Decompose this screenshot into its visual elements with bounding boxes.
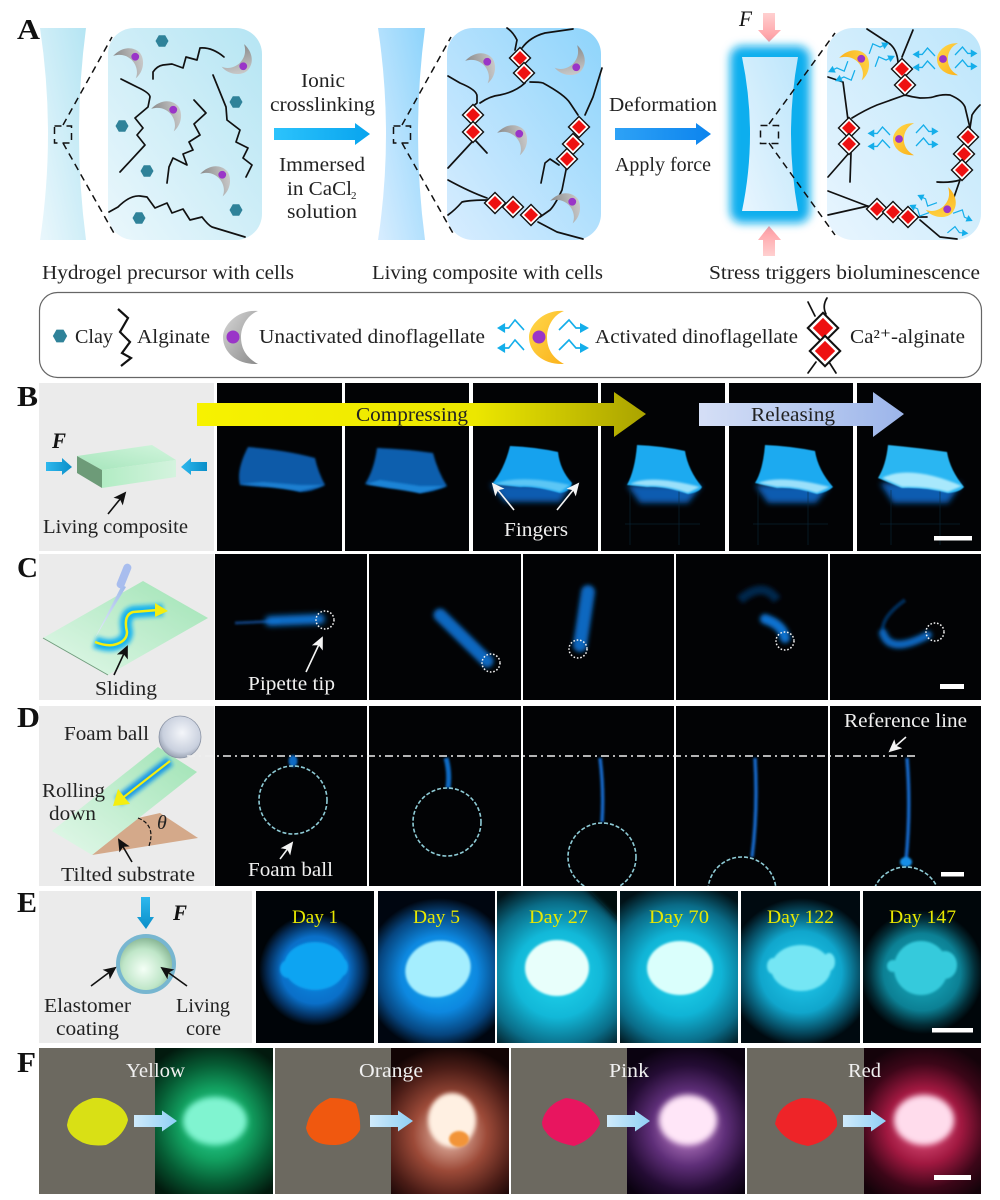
photo day 122 — [741, 891, 860, 1043]
arrow: deformation — [615, 123, 711, 145]
streak 3 — [569, 592, 588, 658]
compressing arrow: Compressing — [356, 404, 468, 426]
pipette — [95, 562, 133, 638]
compressing arrow — [197, 392, 646, 437]
dinoflagellate cells — [113, 41, 259, 196]
activated cells — [839, 43, 963, 225]
text: immersed in CaCl2 solution — [279, 154, 365, 223]
elastomer coating: coating — [56, 1018, 119, 1040]
photo day 1 — [256, 891, 374, 1043]
arrow to substrate — [119, 840, 132, 862]
releasing arrow — [699, 392, 904, 437]
text: immersed in CaCl2 solution: 2 — [351, 190, 356, 202]
living core — [176, 995, 230, 1040]
hydrogel precursor strip — [40, 28, 86, 240]
label F: F — [17, 1047, 36, 1079]
photo day 27: Day 27 — [529, 907, 588, 928]
panel D — [17, 702, 981, 935]
photo day 5: Day 5 — [413, 907, 460, 928]
schematic D — [39, 706, 214, 886]
arrows to coating and core — [91, 968, 187, 986]
reference line — [187, 755, 917, 757]
glowing deformed hydrogel — [730, 46, 810, 223]
caption: Tilted substrate — [61, 864, 195, 886]
reference line annotation: Reference line — [844, 710, 967, 732]
sample frame 5 — [753, 445, 833, 545]
pink force arrow bottom — [758, 226, 781, 256]
schematic C — [39, 554, 214, 700]
yellow sample photo — [39, 1048, 273, 1194]
sample frame 1 — [239, 447, 325, 492]
legend text: clay: Clay — [75, 326, 113, 348]
streak 5 — [883, 600, 944, 645]
zoom panel: activated cells — [760, 28, 981, 240]
zoom panel: hydrogel precursor — [54, 28, 262, 240]
plate — [43, 581, 208, 675]
legend text: activated: Activated dinoflagellate — [595, 326, 798, 348]
streak 1 — [235, 611, 334, 629]
trail and ball 3 — [567, 756, 637, 886]
photo day 27 — [497, 891, 617, 1043]
fingers annotation: Fingers — [504, 519, 568, 541]
label C: C — [17, 552, 38, 584]
trail and ball 2 — [413, 758, 481, 856]
living core: Living — [176, 995, 230, 1017]
schematic E — [39, 891, 252, 1043]
legend icon: clay — [53, 330, 67, 342]
sample frame 4 — [625, 445, 702, 545]
streak 4 — [740, 590, 794, 650]
pink sample photo — [511, 1048, 745, 1194]
text: ionic crosslinking: Ionic — [301, 70, 345, 92]
calcium crosslinks — [462, 48, 590, 226]
photo day 147: Day 147 — [889, 907, 956, 928]
scale bar E — [932, 1028, 973, 1032]
legend icon: alginate — [118, 309, 131, 366]
red sample photo — [747, 1048, 981, 1194]
brown substrate — [92, 813, 198, 855]
pink force arrow top — [758, 13, 781, 42]
photo day 5 — [378, 891, 495, 1043]
zoom guide lines — [394, 37, 454, 235]
text: immersed in CaCl2 solution: solution — [287, 201, 357, 223]
text: ionic crosslinking — [270, 70, 375, 116]
plate front edge — [43, 638, 108, 675]
legend text: alginate: Alginate — [137, 326, 210, 348]
panel F — [17, 1047, 981, 1194]
zoom guide lines — [760, 33, 835, 235]
foam ball annotation: Foam ball — [248, 859, 333, 881]
text: deformation: Deformation — [609, 94, 717, 116]
coated sphere — [116, 934, 176, 994]
force label F: F — [738, 6, 753, 31]
legend icon: calcium alginate — [808, 298, 840, 373]
sample frame 6 — [878, 445, 964, 545]
yellow arrow — [120, 761, 170, 800]
sample frame 2 — [365, 448, 447, 493]
arrow: ionic crosslinking — [274, 123, 370, 145]
panel A: schematic — [17, 6, 981, 284]
caption: stress triggers: Stress triggers bioluminescence — [709, 262, 980, 284]
sample frame 3 — [490, 446, 572, 502]
pink sample photo: Pink — [609, 1060, 649, 1082]
trail and ball 4 — [708, 756, 776, 886]
orange sample photo — [275, 1048, 509, 1194]
orange sample photo: Orange — [359, 1060, 423, 1082]
scale bar D — [941, 872, 964, 876]
yellow sample photo: Yellow — [126, 1060, 186, 1082]
photo day 70 — [620, 891, 738, 1043]
text: ionic crosslinking: crosslinking — [270, 94, 375, 116]
scale bar C — [940, 684, 964, 689]
rolling down — [42, 780, 105, 825]
scale bar F — [934, 1175, 971, 1180]
emitted light arrows — [826, 37, 978, 237]
foam ball — [159, 716, 201, 758]
calcium crosslinks — [838, 58, 978, 228]
composite block — [77, 445, 176, 488]
theta: θ — [157, 812, 167, 834]
legend text: calcium alginate: Ca²⁺-alginate — [850, 326, 965, 348]
rolling down: Rolling — [42, 780, 105, 802]
photo day 1: Day 1 — [292, 907, 338, 928]
tilted plate — [52, 747, 197, 855]
legend text: unactivated: Unactivated dinoflagellate — [259, 326, 485, 348]
panel E — [17, 880, 981, 1043]
glow trail — [95, 610, 163, 645]
streak 2 — [440, 615, 500, 672]
foam ball label: Foam ball — [64, 723, 149, 745]
yellow arrow head — [113, 789, 130, 806]
scale bar B — [934, 536, 972, 540]
legend icon: activated cell — [497, 311, 589, 364]
zoom panel: crosslinked composite — [394, 28, 602, 240]
force arrow — [137, 897, 154, 929]
legend icon: unactivated cell — [223, 311, 258, 364]
fingers annotation — [493, 484, 578, 541]
living core: core — [186, 1018, 221, 1040]
trail and ball 5 — [874, 756, 938, 886]
panel B — [17, 381, 981, 551]
photo day 122: Day 122 — [767, 907, 834, 928]
pipette tip annotation: Pipette tip — [248, 673, 335, 695]
photo day 147 — [863, 891, 981, 1043]
text: immersed in CaCl2 solution: in CaCl — [287, 178, 352, 200]
crosslinked chains — [828, 29, 980, 239]
caption: Sliding — [95, 678, 157, 700]
label B: B — [17, 381, 38, 413]
theta — [138, 812, 167, 846]
force label: F — [51, 428, 66, 453]
living composite strip — [378, 28, 425, 240]
caption: hydrogel precursor: Hydrogel precursor with cells — [42, 262, 294, 284]
photo frames B — [217, 383, 981, 551]
label D: D — [17, 702, 40, 734]
reference line annotation — [844, 710, 967, 751]
text: apply force: Apply force — [615, 154, 711, 176]
crosslinked chains — [448, 28, 602, 239]
elastomer coating — [44, 995, 131, 1040]
trail and ball 1 — [259, 755, 327, 834]
zoom guide lines — [54, 37, 115, 235]
arrow to block — [108, 493, 125, 514]
rolling down: down — [49, 803, 96, 825]
legend — [40, 292, 982, 378]
panel C — [17, 552, 981, 700]
alginate chains — [109, 48, 252, 237]
pipette tip annotation — [248, 638, 335, 695]
releasing arrow: Releasing — [751, 404, 835, 426]
caption: Living composite — [43, 516, 188, 538]
text: immersed in CaCl2 solution: Immersed — [279, 154, 365, 176]
dinoflagellate cells — [465, 45, 592, 223]
foam ball annotation — [248, 843, 333, 881]
elastomer coating: Elastomer — [44, 995, 131, 1017]
arrow to sliding — [114, 647, 127, 675]
yellow path arrow — [95, 603, 168, 645]
clay particles — [116, 35, 242, 224]
photo frames D — [215, 706, 981, 886]
force label: F — [172, 900, 187, 925]
label E: E — [17, 887, 37, 919]
schematic B — [39, 383, 214, 551]
photo day 70: Day 70 — [649, 907, 709, 928]
photo frames C — [215, 554, 981, 700]
red sample photo: Red — [848, 1060, 881, 1082]
arrows pressing — [46, 458, 207, 475]
glow trail — [118, 761, 170, 801]
label A: A — [17, 14, 40, 46]
caption: living composite: Living composite with cells — [372, 262, 603, 284]
